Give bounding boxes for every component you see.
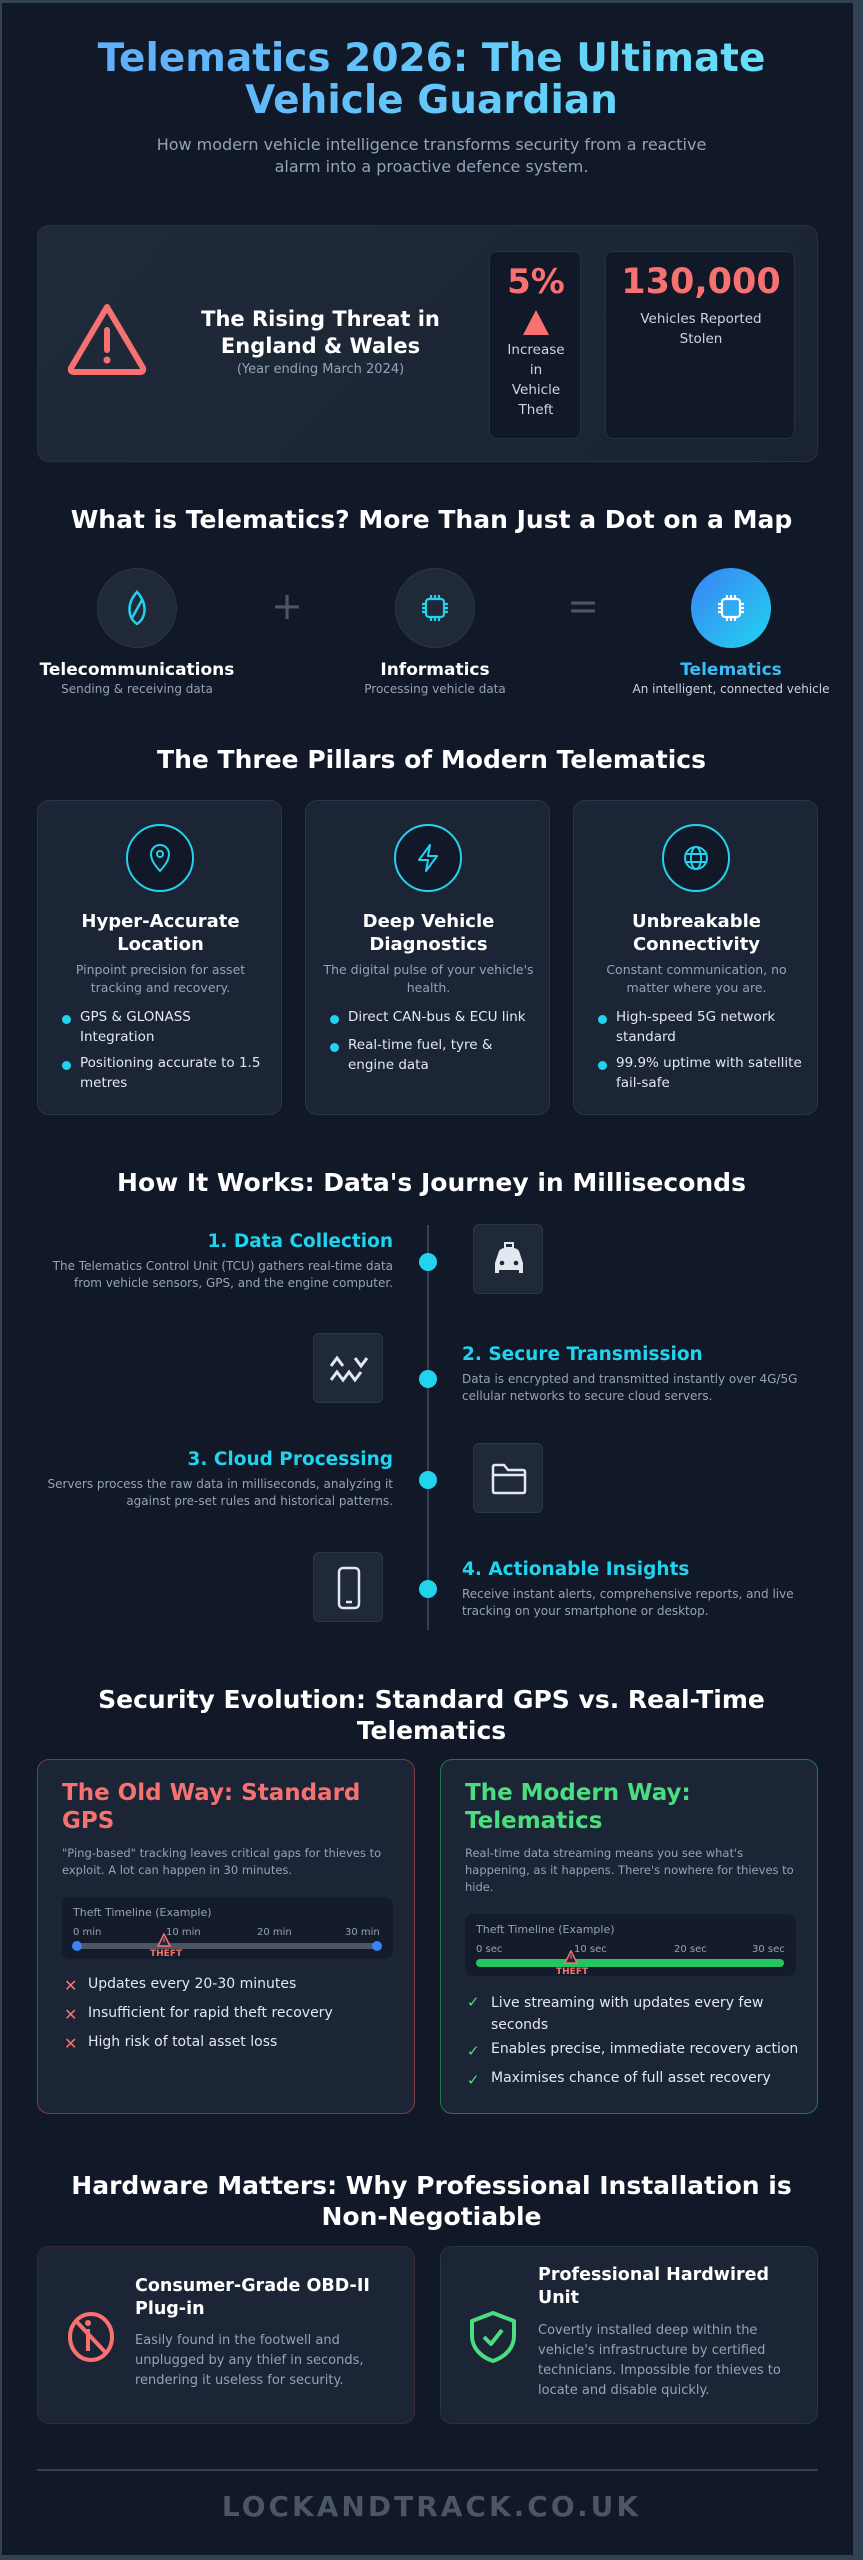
equation: telecommunications: Sending & receiving data (61, 682, 213, 696)
equation: telecommunications: Telecommunications (40, 660, 234, 680)
icon: no symbol (68, 2312, 114, 2362)
panel: connectivity pillar: 99.9% uptime with satellite (616, 1055, 802, 1071)
chart: modern timeline: 20 sec (674, 1944, 707, 1955)
panel: old way: The Old Way: Standard (62, 1780, 360, 1806)
panel: old way: exploit. A lot can happen in 30 minutes. (62, 1863, 292, 1877)
icon: folder (473, 1443, 543, 1513)
subtitle (157, 135, 706, 176)
panel: old way: GPS (62, 1808, 114, 1834)
chart: modern timeline: Theft Timeline (Example) (476, 1923, 615, 1936)
panel: diagnostics pillar: engine data (348, 1057, 429, 1073)
icon: equals: = (567, 584, 599, 628)
panel: modern way: seconds (491, 2017, 548, 2033)
chart: old timeline (62, 1897, 393, 1959)
step 3: 3. Cloud Processing (187, 1449, 393, 1470)
chart: old timeline: THEFT (150, 1949, 182, 1959)
title: Telematics 2026: The Ultimate (98, 36, 765, 81)
chart: modern timeline: THEFT (556, 1967, 588, 1977)
equation: informatics (364, 568, 506, 696)
stat: 130,000: Vehicles Reported (640, 311, 762, 327)
panel: diagnostics pillar: The digital pulse of your vehicle's (323, 962, 534, 977)
panel: diagnostics pillar: Deep Vehicle (363, 911, 494, 932)
panel: modern way: Enables precise, immediate recovery action (491, 2041, 798, 2057)
equation: telematics: An intelligent, connected vehicle (632, 682, 830, 696)
panel: modern way: The Modern Way: (465, 1780, 691, 1806)
icon: signal (313, 1333, 383, 1403)
heading: hardware matters (71, 2171, 792, 2231)
step 4 (313, 1552, 794, 1622)
panel: old way: Updates every 20-30 minutes (88, 1976, 296, 1992)
equation: informatics: Processing vehicle data (364, 682, 506, 696)
panel: modern way: hide. (465, 1880, 494, 1894)
equation: telecommunications (40, 568, 234, 696)
heading: what is telematics: What is Telematics? More Than Just a Dot on a Map (71, 505, 792, 534)
panel: modern way: ✓ (467, 1993, 480, 2011)
panel: location pillar: tracking and recovery. (91, 980, 230, 995)
chart: modern timeline: 30 sec (752, 1944, 785, 1955)
icon: globe (662, 824, 730, 892)
heading: hardware matters: Non-Negotiable (321, 2202, 542, 2231)
step 4: tracking on your smartphone or desktop. (462, 1604, 709, 1618)
panel: professional hardwired: Unit (538, 2288, 579, 2308)
panel: location pillar (37, 800, 282, 1115)
icon: plus: + (271, 584, 303, 628)
step 2: cellular networks to secure cloud servers. (462, 1389, 712, 1403)
heading: security evolution: Telematics (357, 1716, 506, 1745)
panel: connectivity pillar: matter where you are. (627, 980, 766, 995)
chart: old timeline: 30 min (345, 1927, 380, 1938)
chart: modern timeline: 10 sec (574, 1944, 607, 1955)
step 2: 2. Secure Transmission (462, 1344, 703, 1365)
panel: modern way: ✓ (467, 2071, 480, 2089)
panel: location pillar: GPS & GLONASS (80, 1009, 191, 1025)
panel: diagnostics pillar: health. (407, 980, 450, 995)
panel: old way (37, 1759, 415, 2114)
panel: old way: Insufficient for rapid theft recovery (88, 2005, 333, 2021)
stat: 5%: in (530, 362, 542, 378)
chart: old timeline: 20 min (257, 1927, 292, 1938)
panel: diagnostics pillar (305, 800, 550, 1115)
panel: modern way: happening, as it happens. There's nowhere for thieves to (465, 1863, 794, 1877)
panel: modern way: Live streaming with updates every few (491, 1995, 763, 2011)
heading: rising threat: The Rising Threat in (201, 307, 440, 331)
footer brand: LOCKANDTRACK.CO.UK (222, 2490, 641, 2523)
heading: rising threat (201, 307, 440, 358)
chart: old timeline: 10 min (166, 1927, 201, 1938)
step 4: Receive instant alerts, comprehensive reports, and live (462, 1587, 794, 1601)
panel: diagnostics pillar: Direct CAN-bus & ECU link (348, 1009, 526, 1025)
icon: chip white (718, 595, 744, 621)
step 1: from vehicle sensors, GPS, and the engine computer. (74, 1276, 393, 1290)
heading: how it works: How It Works: Data's Journey in Milliseconds (117, 1168, 746, 1197)
panel: professional hardwired: Covertly installed deep within the (538, 2323, 757, 2338)
panel: connectivity pillar: fail-safe (616, 1075, 670, 1091)
panel: connectivity pillar: High-speed 5G network (616, 1009, 775, 1025)
equation: telematics: Telematics (680, 660, 782, 680)
equation: informatics: Informatics (380, 660, 490, 680)
title (0, 38, 863, 122)
heading: security evolution (98, 1685, 765, 1745)
heading: three pillars: The Three Pillars of Modern Telematics (157, 745, 706, 774)
panel: professional hardwired: vehicle's infrastructure by certified (538, 2343, 765, 2358)
panel: old way: "Ping-based" tracking leaves critical gaps for thieves to (62, 1846, 381, 1860)
panel: old way: ✕ (64, 2005, 77, 2024)
stat: 5%: Theft (519, 402, 553, 418)
panel: modern way: Telematics (465, 1808, 602, 1834)
panel: modern way: Maximises chance of full asset recovery (491, 2070, 771, 2086)
panel: modern way (440, 1759, 818, 2114)
panel: connectivity pillar (573, 800, 818, 1115)
panel: consumer OBD: Plug-in (135, 2299, 205, 2319)
stat: 130,000: Stolen (680, 331, 722, 347)
panel: location pillar: Hyper-Accurate (81, 911, 240, 932)
icon: leaf/signal (128, 590, 146, 626)
panel: consumer OBD (37, 2246, 415, 2424)
icon: pin (126, 824, 194, 892)
panel: professional hardwired: Professional Hardwired (538, 2265, 769, 2285)
panel: old way: ✕ (64, 1976, 77, 1995)
panel: connectivity pillar: Connectivity (633, 934, 760, 955)
panel: consumer OBD: Easily found in the footwell and (135, 2333, 340, 2348)
chart: modern timeline (465, 1914, 796, 1976)
icon: bolt (394, 824, 462, 892)
step 4: 4. Actionable Insights (462, 1559, 689, 1580)
step 2 (313, 1333, 797, 1403)
heading: hardware matters: Hardware Matters: Why Professional Installation is (71, 2171, 792, 2200)
panel: rising threat (37, 225, 818, 462)
subtitle: How modern vehicle intelligence transforms security from a reactive (157, 135, 706, 154)
step 3: against pre-set rules and historical patterns. (126, 1494, 393, 1508)
heading: security evolution: Security Evolution: Standard GPS vs. Real-Time (98, 1685, 765, 1714)
panel: old way: ✕ (64, 2034, 77, 2053)
title: Vehicle Guardian (245, 78, 618, 123)
chart: modern timeline: 0 sec (476, 1944, 502, 1955)
icon: phone (313, 1552, 383, 1622)
panel: location pillar: Positioning accurate to 1.5 (80, 1055, 260, 1071)
heading: rising threat: England & Wales (221, 334, 420, 358)
panel: diagnostics pillar: Diagnostics (369, 934, 488, 955)
panel: consumer OBD: Consumer-Grade OBD-II (135, 2276, 370, 2296)
panel: consumer OBD: unplugged by any thief in seconds, (135, 2353, 363, 2368)
stat: 5%: Increase (507, 342, 565, 358)
timeline (47, 1224, 797, 1630)
panel: modern way: Real-time data streaming means you see what's (465, 1846, 743, 1860)
panel: connectivity pillar: Unbreakable (632, 911, 761, 932)
panel: connectivity pillar: Constant communication, no (606, 962, 787, 977)
icon: car (473, 1224, 543, 1294)
panel: professional hardwired: technicians. Impossible for thieves to (538, 2363, 781, 2378)
text: year ending: (Year ending March 2024) (237, 362, 404, 377)
panel: modern way: ✓ (467, 2042, 480, 2060)
panel: professional hardwired (440, 2246, 818, 2424)
step 3: Servers process the raw data in milliseconds, analyzing it (47, 1477, 393, 1491)
stat: 5%: 5% (507, 262, 565, 302)
panel: location pillar: Pinpoint precision for asset (76, 962, 245, 977)
chart: old timeline: Theft Timeline (Example) (73, 1906, 212, 1919)
stat: 5%: Vehicle (512, 382, 560, 398)
stat: 5% (489, 251, 581, 439)
icon: warning triangle (68, 304, 146, 375)
panel: professional hardwired: locate and disable quickly. (538, 2383, 709, 2398)
panel: location pillar: Integration (80, 1029, 154, 1045)
panel: diagnostics pillar: Real-time fuel, tyre & (348, 1037, 492, 1053)
panel: consumer OBD: rendering it useless for security. (135, 2373, 343, 2388)
subtitle: alarm into a proactive defence system. (275, 157, 588, 176)
step 1: The Telematics Control Unit (TCU) gathers real-time data (53, 1259, 393, 1273)
step 1 (52, 1224, 543, 1294)
stat: 130,000 (605, 251, 795, 439)
step 2: Data is encrypted and transmitted instantly over 4G/5G (462, 1372, 797, 1386)
panel: old way: High risk of total asset loss (88, 2034, 277, 2050)
icon: chip (422, 595, 448, 621)
stat: 130,000: 130,000 (621, 262, 781, 302)
chart: old timeline: 0 min (73, 1927, 101, 1938)
icon: shield check (470, 2311, 516, 2363)
panel: location pillar: metres (80, 1075, 127, 1091)
step 3 (47, 1443, 543, 1513)
step 1: 1. Data Collection (208, 1231, 393, 1252)
panel: location pillar: Location (117, 934, 204, 955)
equation: telematics (632, 568, 830, 696)
panel: connectivity pillar: standard (616, 1029, 676, 1045)
